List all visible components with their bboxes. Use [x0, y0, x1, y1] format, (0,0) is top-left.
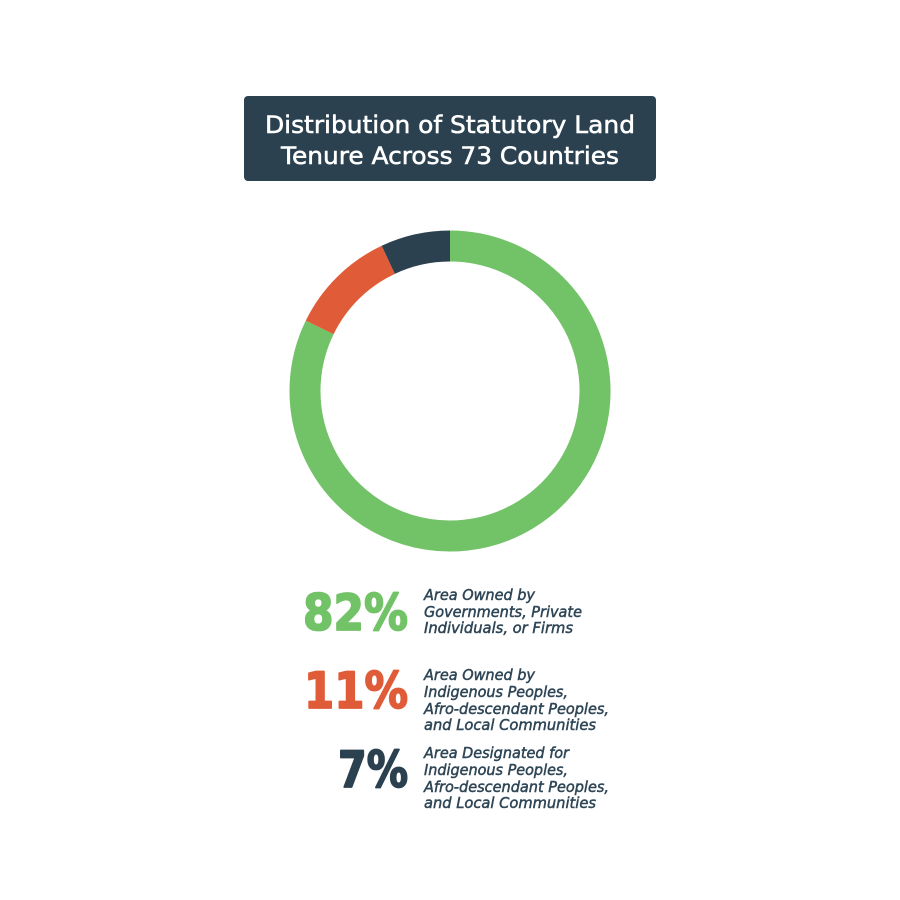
legend: 82%: Area Owned by [423, 586, 536, 604]
legend: 11%: and Local Communities [424, 716, 596, 734]
legend: 7%: 7% [338, 741, 408, 799]
title: Tenure Across 73 Countries [280, 142, 619, 170]
legend: 7%: Indigenous Peoples, [424, 761, 568, 779]
title [244, 96, 656, 181]
legend: 11%: Area Owned by [423, 666, 536, 684]
legend: 7% [338, 741, 609, 812]
legend: 7%: Afro-descendant Peoples, [423, 778, 609, 796]
legend: 11%: 11% [304, 662, 408, 720]
legend: 11%: Afro-descendant Peoples, [423, 700, 609, 718]
legend: 11%: Indigenous Peoples, [424, 683, 568, 701]
legend: 7%: Area Designated for [423, 744, 570, 762]
legend: 11% [304, 662, 609, 734]
legend: 82%: 82% [303, 584, 408, 642]
legend: 82%: Individuals, or Firms [424, 619, 573, 637]
donut chart [305, 246, 595, 536]
title: Distribution of Statutory Land [265, 111, 635, 139]
legend: 82% [303, 584, 582, 642]
legend: 82%: Governments, Private [424, 603, 582, 621]
legend: 7%: and Local Communities [424, 794, 596, 812]
